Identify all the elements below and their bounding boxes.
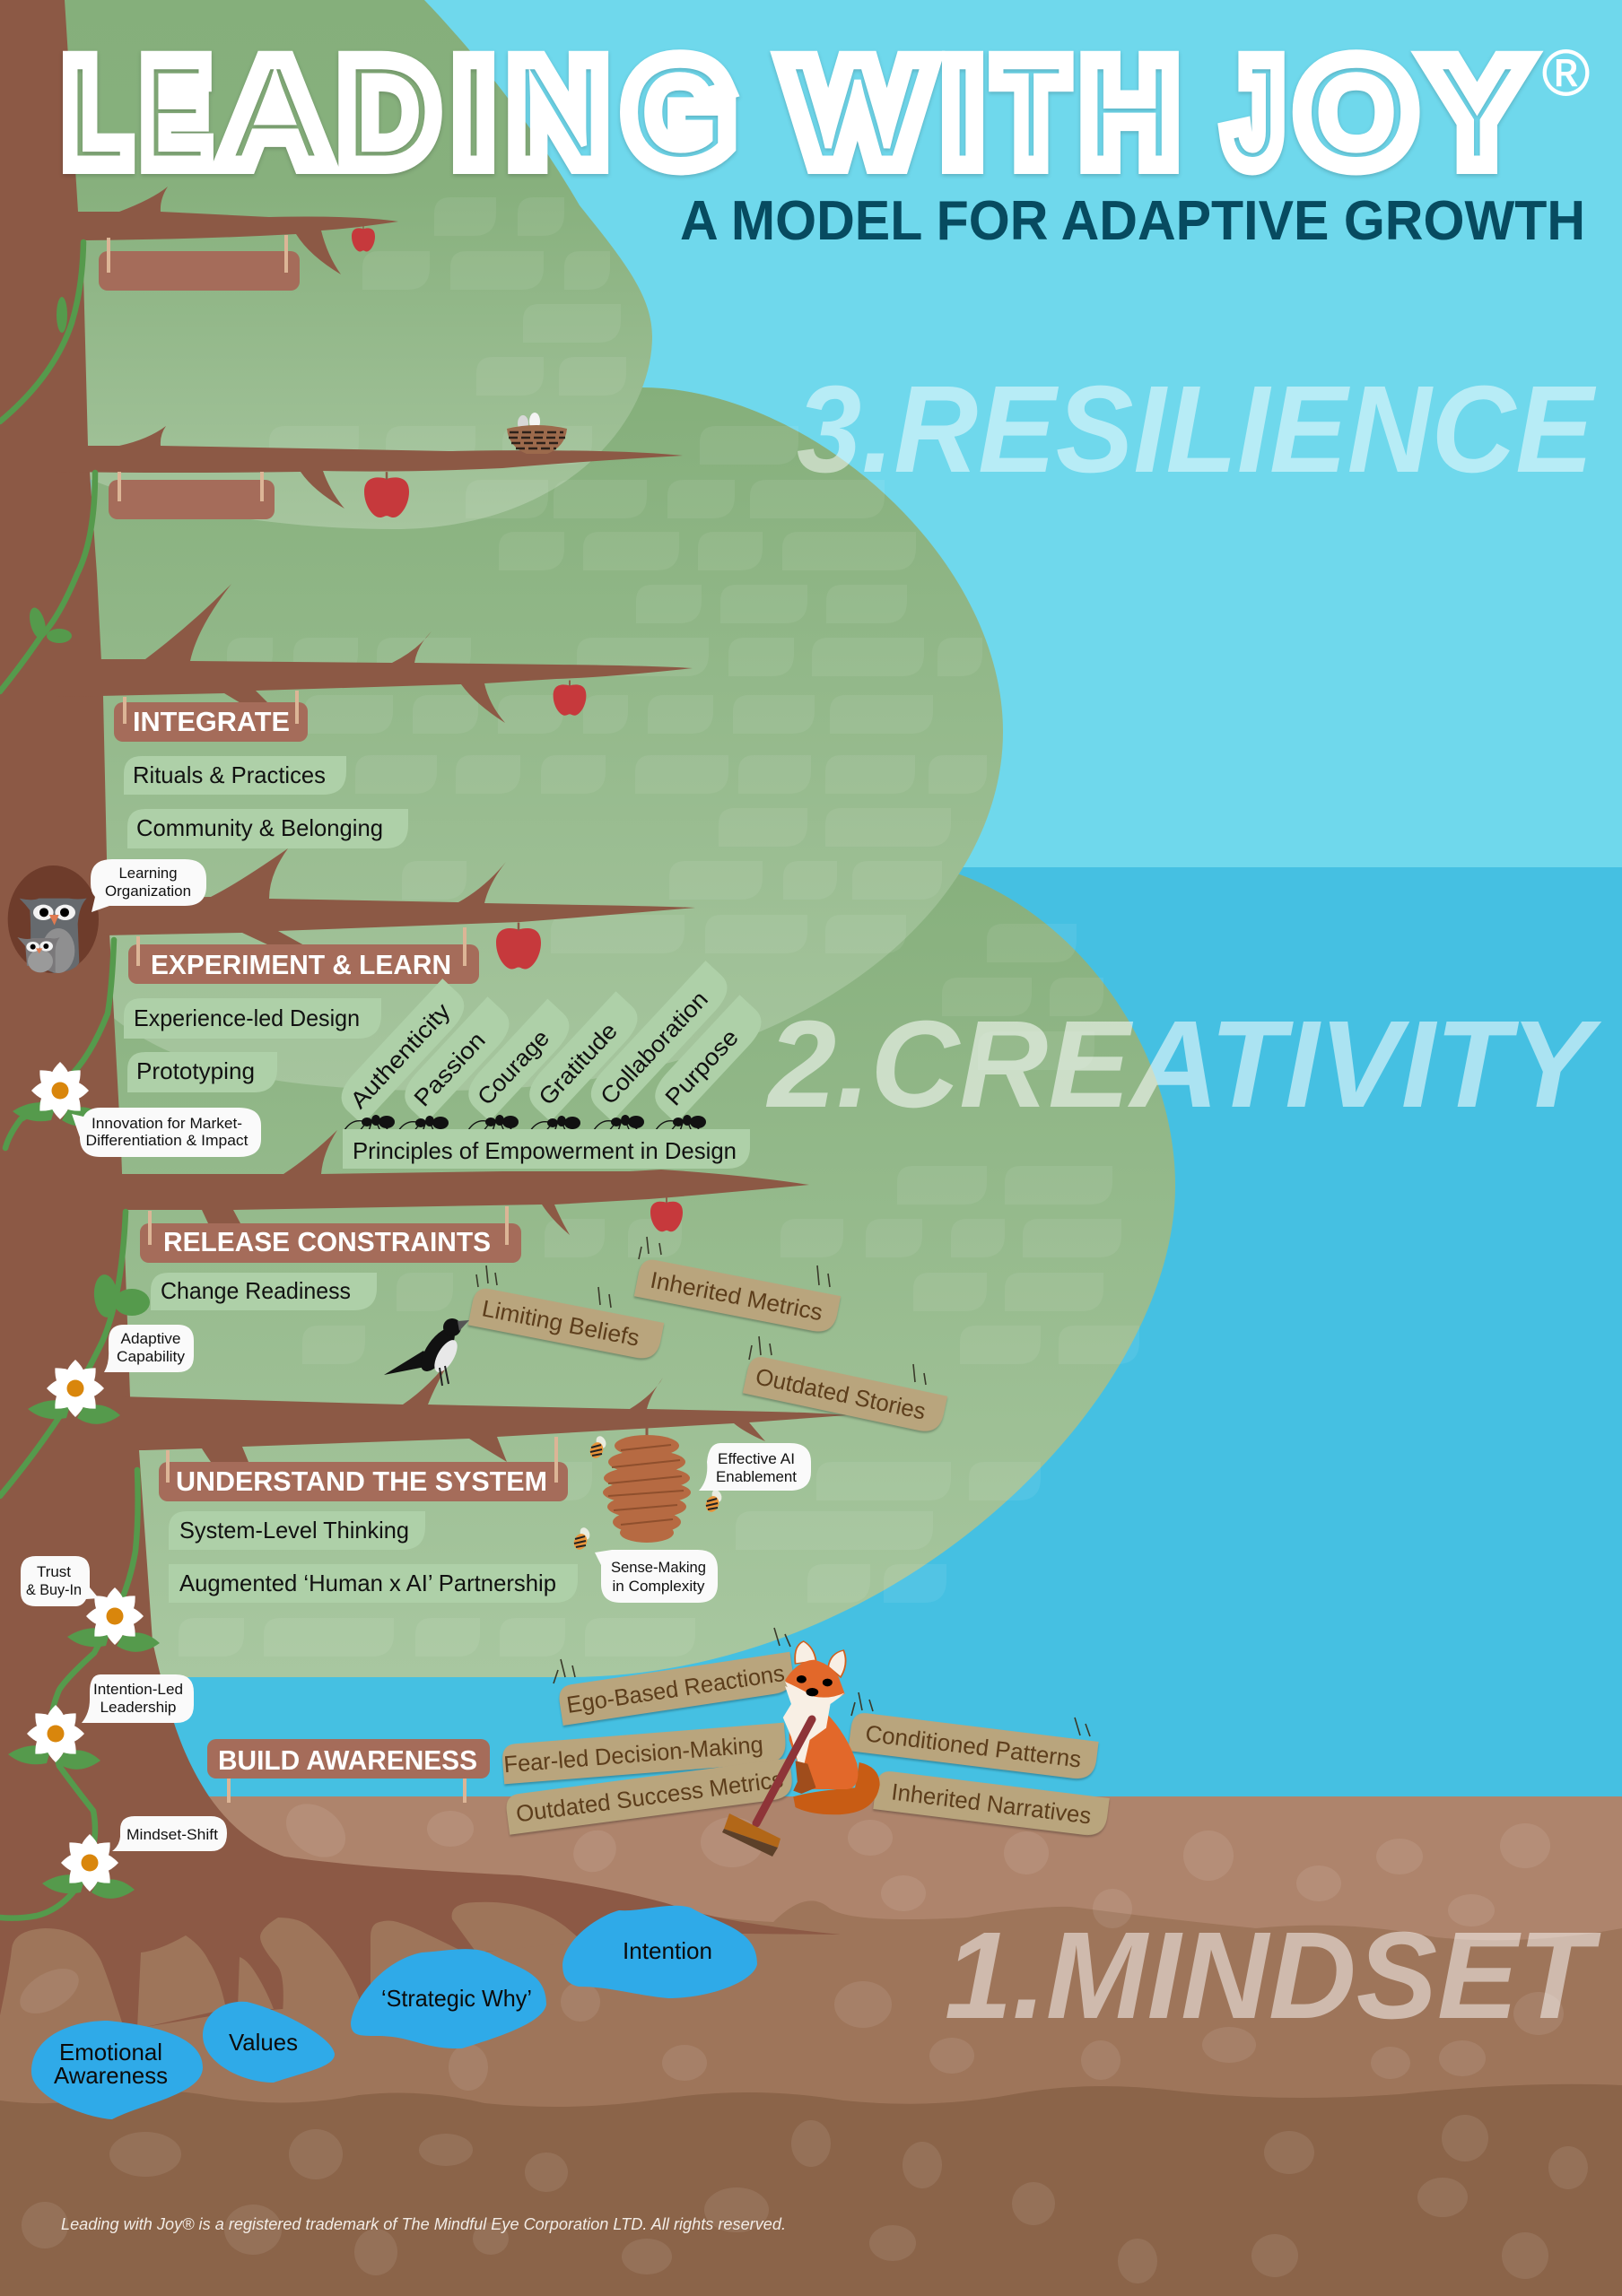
sign: build awareness: BUILD AWARENESS bbox=[218, 1744, 477, 1776]
footnote: Leading with Joy® is a registered trademark of The Mindful Eye Corporation LTD. All rights reserved. bbox=[61, 2214, 786, 2233]
sign: understand the system: UNDERSTAND THE SYSTEM bbox=[176, 1465, 547, 1497]
title: H bbox=[1085, 37, 1174, 187]
magpie bird bbox=[384, 1318, 469, 1386]
branch 3 bbox=[54, 584, 693, 723]
sign: integrate bbox=[114, 691, 308, 742]
bubble: adaptive capability: Capability bbox=[117, 1349, 186, 1365]
bubble: sense-making bbox=[595, 1550, 718, 1603]
branch 5 bbox=[54, 1130, 809, 1235]
branch 4 bbox=[54, 848, 695, 945]
pill: principles of empowerment: Principles of Empowerment in Design bbox=[353, 1137, 737, 1164]
title: D bbox=[343, 37, 434, 187]
blue pool: values: Values bbox=[229, 2029, 298, 2056]
apple 4 bbox=[496, 923, 541, 970]
vine leaves bbox=[27, 297, 150, 1318]
bubble: adaptive capability bbox=[104, 1325, 194, 1372]
tan sign: inherited metrics: Inherited Metrics bbox=[648, 1266, 825, 1326]
title: T bbox=[998, 37, 1064, 187]
title: L bbox=[66, 37, 126, 187]
stage heading: resilience: 3.RESILIENCE bbox=[797, 361, 1597, 499]
pill: principles of empowerment bbox=[343, 1129, 750, 1169]
nest with eggs bbox=[507, 413, 567, 454]
pill: prototyping: Prototyping bbox=[136, 1057, 255, 1084]
blue pool: emotional awareness bbox=[31, 2021, 203, 2119]
foliage: middle canopy bbox=[90, 387, 1003, 1091]
bubble: intention-led leadership bbox=[82, 1674, 194, 1723]
blue pool: strategic why: ‘Strategic Why’ bbox=[381, 1985, 532, 2012]
subtitle: A MODEL FOR ADAPTIVE GROWTH bbox=[680, 190, 1585, 252]
pill: change readiness: Change Readiness bbox=[161, 1277, 351, 1304]
bubble: effective AI enablement bbox=[699, 1443, 811, 1491]
title: A bbox=[231, 37, 319, 187]
pill: experience-led design: Experience-led Design bbox=[134, 1004, 360, 1031]
stage heading: mindset: 1.MINDSET bbox=[945, 1907, 1601, 2045]
stage heading: creativity: 2.CREATIVITY bbox=[765, 996, 1602, 1134]
sign: experiment and learn bbox=[128, 927, 479, 984]
bubble: sense-making: Sense-Making bbox=[611, 1560, 706, 1576]
diagonal leaf: passion: Passion bbox=[408, 1026, 491, 1112]
bubble: effective AI enablement: Effective AI bbox=[718, 1451, 795, 1467]
tan sign: conditioned patterns bbox=[848, 1711, 1099, 1781]
title: G bbox=[628, 39, 731, 187]
blue pool: emotional awareness: Awareness bbox=[54, 2062, 168, 2089]
tan sign: inherited metrics bbox=[634, 1257, 841, 1335]
pill: system-level thinking: System-Level Thinking bbox=[179, 1517, 409, 1544]
bubble: trust and buy-in bbox=[21, 1556, 99, 1606]
bubble: trust and buy-in: & Buy-In bbox=[26, 1582, 82, 1598]
tan sign: outdated stories bbox=[743, 1354, 947, 1435]
apple 1 bbox=[352, 225, 375, 251]
bubble: trust and buy-in: Trust bbox=[37, 1564, 71, 1580]
bubble: innovation: Innovation for Market- bbox=[92, 1116, 242, 1132]
flower: adaptive capability bbox=[28, 1360, 120, 1424]
blue pool: intention: Intention bbox=[623, 1937, 712, 1964]
diagonal leaf: collaboration bbox=[582, 961, 736, 1121]
foliage: lower canopy bbox=[108, 867, 1175, 1677]
diagonal leaf: authenticity: Authenticity bbox=[344, 997, 456, 1114]
diagonal leaf: courage bbox=[459, 999, 578, 1121]
falling marks bbox=[476, 1237, 1090, 1736]
bee 3 bbox=[571, 1526, 591, 1552]
blue pool: intention bbox=[562, 1906, 757, 1998]
diagonal leaf: gratitude bbox=[520, 991, 646, 1122]
sign: integrate: INTEGRATE bbox=[133, 706, 290, 737]
tan sign: ego-based reactions: Ego-Based Reactions bbox=[565, 1659, 786, 1718]
tan sign: fear-led decision-making: Fear-led Decision-Making bbox=[502, 1731, 764, 1778]
sign: understand the system bbox=[159, 1437, 568, 1501]
vines bbox=[0, 242, 138, 1918]
tan sign: outdated stories: Outdated Stories bbox=[754, 1362, 929, 1425]
tan sign: limiting beliefs: Limiting Beliefs bbox=[480, 1294, 641, 1352]
sign 1: empty hanging sign bbox=[99, 235, 300, 291]
owl hollow with two owls bbox=[8, 865, 99, 973]
title: E bbox=[144, 39, 207, 187]
apple 5 bbox=[650, 1197, 683, 1231]
pill: prototyping bbox=[127, 1052, 277, 1092]
title: W bbox=[790, 37, 924, 187]
pill: community and belonging bbox=[127, 809, 408, 848]
title: Y bbox=[1435, 37, 1520, 187]
pill: community and belonging: Community & Belonging bbox=[136, 814, 383, 841]
soil: top layer bbox=[0, 1796, 1622, 1976]
tree trunk and main root bbox=[0, 0, 841, 2029]
tan sign: inherited narratives: Inherited Narratives bbox=[890, 1778, 1093, 1830]
diagonal leaf: authenticity bbox=[332, 978, 473, 1125]
bubble: intention-led leadership: Leadership bbox=[100, 1700, 176, 1716]
sign: release constraints bbox=[140, 1206, 521, 1263]
title: N bbox=[512, 39, 605, 188]
bubble: intention-led leadership: Intention-Led bbox=[93, 1682, 183, 1698]
bee 1 bbox=[588, 1435, 607, 1460]
bubble: adaptive capability: Adaptive bbox=[120, 1331, 181, 1347]
tan sign: conditioned patterns: Conditioned Patterns bbox=[864, 1719, 1083, 1773]
bubble: learning organization bbox=[91, 859, 206, 912]
diagonal leaf: purpose: Purpose bbox=[659, 1023, 744, 1111]
bubble: mindset-shift: Mindset-Shift bbox=[126, 1827, 218, 1843]
apple 3 bbox=[554, 681, 586, 716]
soil pebbles bbox=[13, 1793, 1588, 2283]
bubble: effective AI enablement: Enablement bbox=[716, 1469, 797, 1485]
sign: experiment and learn: EXPERIMENT & LEARN bbox=[151, 949, 451, 980]
beehive bbox=[603, 1426, 691, 1543]
title: I bbox=[456, 38, 492, 188]
branch 6 bbox=[54, 1355, 847, 1462]
sign: release constraints: RELEASE CONSTRAINTS bbox=[163, 1226, 491, 1257]
branch 2 bbox=[54, 426, 683, 509]
sky upper band bbox=[0, 0, 1622, 867]
blue pool: strategic why bbox=[351, 1949, 546, 2048]
bubble: innovation: Differentiation & Impact bbox=[86, 1133, 249, 1149]
title: I bbox=[945, 38, 981, 188]
sign 2: empty hanging sign bbox=[109, 472, 275, 519]
bubble: innovation bbox=[72, 1108, 261, 1157]
pill: change readiness bbox=[151, 1273, 377, 1310]
flower: intention-led leadership bbox=[8, 1705, 100, 1770]
pill: rituals and practices bbox=[124, 756, 346, 795]
diagonal leaf: courage: Courage bbox=[472, 1024, 554, 1110]
flower: trust bbox=[67, 1587, 160, 1652]
blue pool: values bbox=[203, 2002, 335, 2083]
registered mark: ® bbox=[1542, 38, 1590, 109]
bubble: learning organization: Learning bbox=[118, 865, 178, 882]
apple 2 bbox=[364, 472, 409, 517]
soil: deep layer bbox=[0, 2084, 1622, 2296]
diagonal leaf: collaboration: Collaboration bbox=[595, 986, 713, 1109]
pill: experience-led design bbox=[124, 998, 381, 1039]
bee 2 bbox=[703, 1489, 723, 1514]
tan sign: inherited narratives bbox=[873, 1770, 1110, 1838]
diagonal leaf: passion bbox=[396, 996, 518, 1123]
foliage: upper canopy bbox=[54, 0, 652, 529]
foliage leaf texture bbox=[179, 197, 1139, 1657]
bubble: sense-making: in Complexity bbox=[612, 1578, 705, 1595]
pill: rituals and practices: Rituals & Practices bbox=[133, 761, 326, 788]
flower: mindset-shift bbox=[42, 1834, 135, 1899]
soil between roots bbox=[0, 1902, 583, 2034]
blue pool: emotional awareness: Emotional bbox=[59, 2039, 162, 2066]
soil: middle layer bbox=[0, 1900, 1622, 2152]
pill: augmented partnership: Augmented ‘Human x AI’ Partnership bbox=[179, 1570, 556, 1596]
broom bbox=[722, 1719, 812, 1857]
sky lower band bbox=[0, 867, 1622, 1800]
title: O bbox=[1302, 38, 1410, 187]
diagonal leaf: purpose bbox=[646, 995, 770, 1124]
bubble: learning organization: Organization bbox=[105, 883, 191, 900]
pill: system-level thinking bbox=[169, 1511, 425, 1550]
branch 1 bbox=[54, 187, 398, 274]
tan sign: outdated success metrics: Outdated Success Metrics bbox=[514, 1766, 785, 1827]
diagonal leaf: gratitude: Gratitude bbox=[533, 1017, 623, 1110]
pill: augmented partnership bbox=[169, 1564, 578, 1603]
flower: innovation bbox=[13, 1062, 105, 1126]
fox bbox=[783, 1641, 880, 1814]
ants bbox=[344, 1115, 706, 1136]
bubble: mindset-shift bbox=[112, 1816, 227, 1851]
tan sign: limiting beliefs bbox=[468, 1286, 664, 1361]
sign: build awareness bbox=[207, 1739, 490, 1803]
title: J bbox=[1229, 39, 1280, 188]
